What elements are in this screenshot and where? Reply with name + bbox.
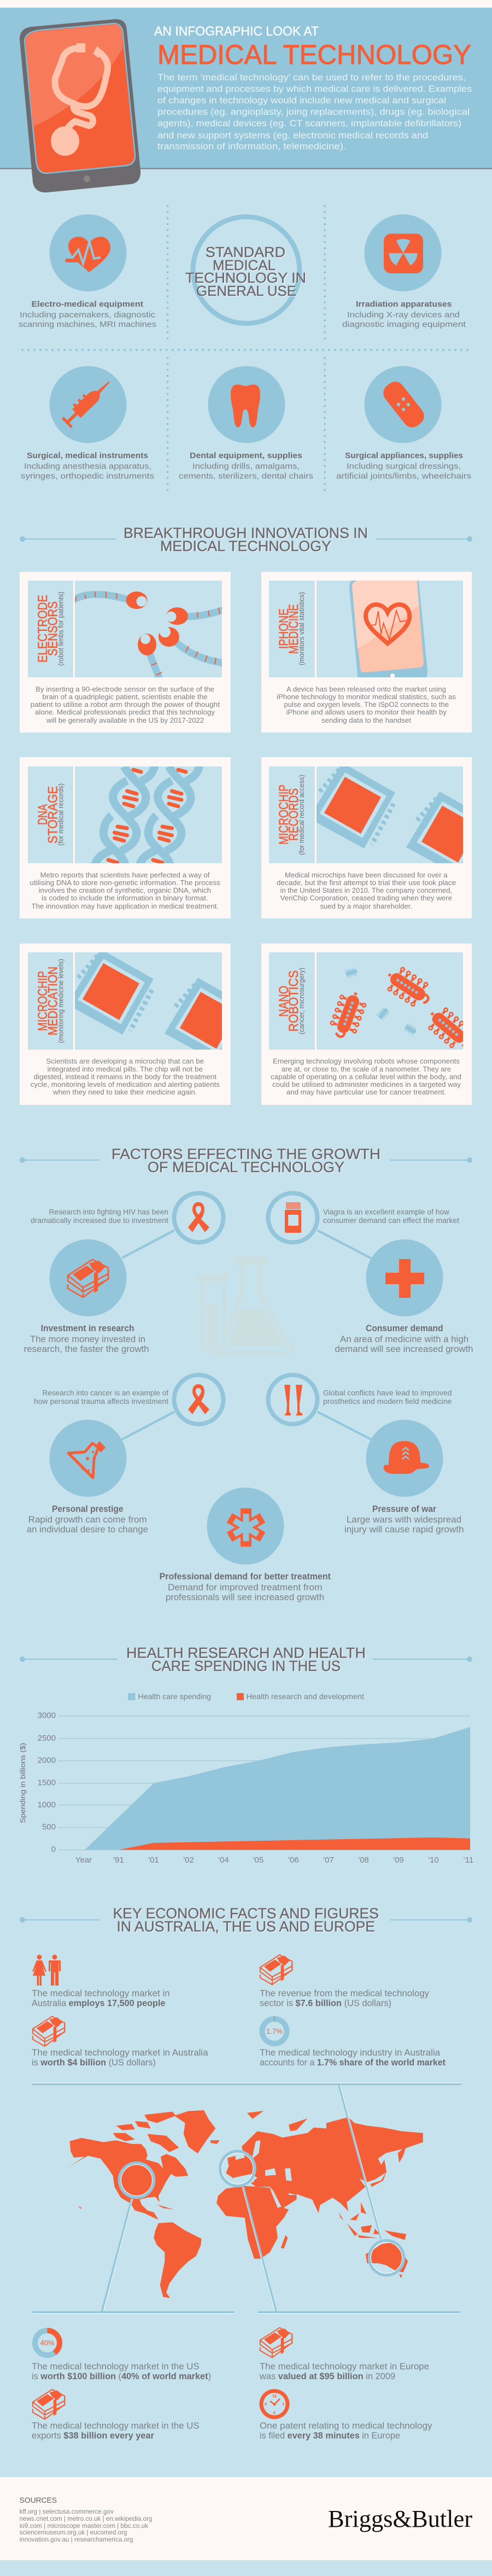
item: surgical, medical instruments: syringes, orthopedic instruments (21, 472, 154, 481)
factor: consumer demand: demand will see increased growth (335, 1344, 473, 1354)
area: health care spending (85, 1727, 470, 1850)
item: irradiation apparatuses (342, 214, 466, 329)
header title (154, 24, 471, 70)
item: surgical appliances, supplies: Surgical appliances, supplies (345, 451, 463, 460)
header title: AN INFOGRAPHIC LOOK AT (154, 24, 319, 39)
description: and may have particular use for cancer treatment. (286, 1088, 446, 1096)
vertical title (277, 775, 306, 855)
panel: footer (0, 2477, 492, 2560)
donut: 40 percent (35, 2331, 60, 2355)
heading: health research and spending: CARE SPENDING IN THE US (151, 1658, 341, 1675)
description (277, 871, 456, 910)
description: sending data to the handset (321, 716, 411, 724)
vertical title: DNA (36, 804, 50, 825)
fact: 1.7% share (260, 2016, 446, 2068)
description: A device has been released onto the market using (286, 685, 446, 693)
factor: personal prestige (27, 1375, 224, 1535)
heading: factors effecting growth: OF MEDICAL TECHNOLOGY (148, 1159, 344, 1175)
ring callout (34, 1375, 223, 1424)
ring callout: how personal trauma affects investment (34, 1397, 168, 1406)
fact: revenue $7.6 billion (260, 1955, 430, 2009)
legend: Health care spending (138, 1692, 211, 1701)
factor: pressure of war: Large wars with widespread (347, 1515, 461, 1525)
description: digested, instead it remains in the body for the treatment (33, 1073, 216, 1081)
region rings (119, 2151, 403, 2275)
description: By inserting a 90-electrode sensor on the surface of the (36, 685, 214, 693)
description: is coded to include the information in binary format. (42, 894, 208, 902)
factor: consumer demand: An area of medicine with a high (340, 1334, 468, 1344)
icon: clock: 3 (282, 2403, 284, 2407)
icon: clock (259, 2389, 290, 2419)
heading: breakthrough innovations: MEDICAL TECHNOLOGY (160, 538, 331, 554)
x axis labels (75, 1855, 473, 1865)
y axis labels (38, 1711, 56, 1854)
fact: patent every 38 minutes: One patent relating to medical technology (260, 2421, 432, 2431)
fact: exports $38 billion: exports $38 billion every year (32, 2431, 155, 2441)
panel: iphone medicine (261, 572, 472, 733)
item: dental equipment, supplies (179, 366, 313, 481)
item: surgical, medical instruments: Including anesthesia apparatus, (24, 462, 151, 471)
callout lines (32, 2083, 461, 2085)
fact: revenue $7.6 billion: sector is $7.6 billion (US dollars) (260, 1999, 391, 2009)
sources: sciencemuseum.org.uk | eucomed.org (20, 2528, 127, 2536)
ring callout: dramatically increased due to investment (31, 1216, 168, 1225)
vertical title: MEDICINE (286, 604, 301, 654)
fact: valued at $95 billion (259, 2328, 429, 2381)
sources: io9.com | microscope master.com | bbc.co.uk (20, 2522, 149, 2530)
intro paragraph: equipment and processes by which medical care is delivered. Examples (157, 84, 472, 94)
description: iPhone technology to monitor medical statistics, such as (277, 693, 456, 701)
chart: health care spending area chart (19, 1692, 473, 1865)
fact: valued at $95 billion: The medical technology market in Europe (260, 2362, 429, 2372)
map: inland seas (234, 2140, 292, 2182)
intro paragraph: of changes in technology would include new medical and surgical (157, 95, 446, 106)
vertical title: ELECTRODE (36, 595, 50, 663)
icon: clock: 12 (272, 2394, 277, 2398)
y axis labels: 0 (51, 1845, 56, 1854)
description (30, 871, 221, 910)
legend (128, 1692, 364, 1701)
ring callout (268, 1375, 452, 1424)
vertical title: ROBOTICS (286, 970, 301, 1032)
item: irradiation apparatuses: Including X-ray devices and (347, 311, 460, 319)
sources: kff.org | selectusa.commerce.gov (20, 2508, 114, 2515)
item: surgical, medical instruments: Surgical, medical instruments (27, 451, 148, 460)
heading: health research and spending: HEALTH RESEARCH AND HEALTH (126, 1645, 366, 1661)
icon: star of life (227, 1508, 265, 1547)
donut: 40 percent: 40% (40, 2339, 55, 2347)
item: surgical, medical instruments (21, 366, 154, 481)
fact: patent every 38 minutes: is filed every 38 minutes in Europe (260, 2431, 400, 2441)
vertical title: IPHONE (277, 608, 291, 649)
factor: pressure of war: Pressure of war (372, 1504, 437, 1514)
ring callout: consumer demand can effect the market (323, 1216, 459, 1225)
factor: personal prestige: Rapid growth can come from (28, 1515, 147, 1525)
heading: breakthrough innovations: BREAKTHROUGH INNOVATIONS IN (124, 525, 368, 541)
chart: health care spending area chart: Spending in billions ($) (19, 1743, 27, 1823)
logo: Briggs & Butler: Briggs&Butler (328, 2505, 472, 2532)
description: brain of a quadriplegic patient, scientists enable the (43, 693, 208, 701)
sources: SOURCES (20, 2496, 57, 2504)
factor: professional demand: professionals will see increased growth (166, 1593, 324, 1602)
fact: revenue $7.6 billion: The revenue from the medical technology (260, 1989, 430, 1999)
fact: exports $38 billion (32, 2390, 200, 2441)
world map (32, 2083, 461, 2314)
description: alone. Medical professionals predict that this technology (35, 708, 215, 716)
header title: MEDICAL TECHNOLOGY (157, 39, 471, 70)
factor: investment in research (24, 1193, 223, 1354)
vertical title: RECORDS (286, 788, 301, 841)
icon: clock: 9 (265, 2403, 267, 2407)
description: involves the creation of synthetic, organic DNA, which (39, 886, 211, 894)
illustration: nano robots (330, 967, 463, 1049)
intro paragraph: transmission of information, telemedicine). (157, 141, 346, 151)
factor: personal prestige: an individual desire to change (27, 1525, 148, 1535)
icon: clock: 6 (273, 2411, 276, 2415)
heading: factors effecting growth: FACTORS EFFECTING THE GROWTH (112, 1146, 380, 1162)
factor: investment in research: research, the faster the growth (24, 1344, 149, 1354)
fact: patent every 38 minutes (259, 2389, 432, 2441)
centre ring heading: MEDICAL (213, 258, 276, 273)
description: decade, but the first attempt to trial their use took place (277, 879, 456, 887)
item: electro-medical equipment: Electro-medical equipment (32, 300, 143, 309)
sources: news.cnet.com | metro.co.uk | en.wikipedia.org (20, 2515, 152, 2522)
description: cycle, monitoring levels of medication and alerting patients (31, 1080, 220, 1088)
description: Metro reports that scientists have perfected a way of (40, 871, 210, 879)
ring callout: prosthetics and modern field medicine (323, 1397, 452, 1406)
item: surgical appliances, supplies: artificial joints/limbs, wheelchairs (336, 472, 471, 481)
panel: nano robotics (261, 944, 476, 1105)
factor: pressure of war: injury will cause rapid growth (344, 1525, 464, 1535)
factor: personal prestige: Personal prestige (52, 1504, 124, 1514)
centre ring heading: TECHNOLOGY IN (185, 271, 306, 286)
fact: employs 17,500 people (32, 1955, 169, 2009)
fact: exports $38 billion: The medical technology market in the US (32, 2421, 200, 2431)
item: electro-medical equipment (19, 214, 156, 329)
panel: microchip medication (20, 944, 251, 1105)
heading: key economic facts: IN AUSTRALIA, THE US AND EUROPE (117, 1918, 375, 1935)
description: patient to utilise a robot arm through the power of thought (31, 700, 220, 709)
ring callout: Global conflicts have lead to improved (323, 1389, 452, 1397)
description: could be utilised to administer medicines in a targeted way (272, 1080, 461, 1088)
item: dental equipment, supplies: cements, sterilizers, dental chairs (179, 472, 313, 481)
item: electro-medical equipment: scanning machines, MRI machines (19, 320, 156, 329)
description: capable of operating on a cellular level within the body, and (271, 1073, 461, 1081)
illustration: dna helices (95, 763, 200, 867)
centre ring heading: STANDARD (206, 245, 285, 260)
factor: investment in research: The more money invested in (30, 1334, 145, 1344)
vertical title: (cancer, microsurgery) (298, 968, 306, 1034)
illustration: phone with heart (349, 577, 427, 681)
ring callout: Viagra is an excellent example of how (323, 1208, 450, 1216)
panel: dna storage (20, 757, 231, 918)
x axis labels: '04 (218, 1855, 229, 1865)
fact: employs 17,500 people: The medical technology market in (32, 1989, 169, 1999)
description (31, 685, 220, 724)
centre ring heading (185, 216, 306, 324)
description (277, 685, 456, 724)
x axis labels: '91 (113, 1855, 124, 1865)
factor: professional demand: Demand for improved treatment from (168, 1583, 323, 1593)
icon: tipped flask (68, 1441, 106, 1478)
item: dental equipment, supplies: Dental equipment, supplies (190, 451, 302, 460)
description: Scientists are developing a microchip that can be (46, 1057, 204, 1065)
factor: professional demand (160, 1488, 331, 1602)
factor: consumer demand (268, 1193, 473, 1354)
description: sued by a major shareholder. (320, 902, 412, 910)
description: The innovation may have application in medical treatment. (31, 902, 219, 910)
description: in the United States in 2010. The company concerned, (280, 886, 452, 894)
grid dividers (22, 206, 468, 493)
panel: microchip records (261, 757, 492, 918)
factor: consumer demand: Consumer demand (366, 1324, 443, 1333)
vertical title (36, 592, 65, 666)
area: health research and development (119, 1837, 470, 1850)
description: Medical microchips have been discussed for over a (285, 871, 448, 879)
x axis labels: Year (75, 1855, 92, 1865)
x axis labels: '07 (323, 1855, 334, 1865)
description: are at, or close to, the scale of a nanometer. They are (282, 1065, 451, 1073)
ring callout (268, 1193, 459, 1242)
x axis labels: '06 (288, 1855, 299, 1865)
description: VeriChip Corporation, ceased trading when they were (280, 894, 452, 902)
heading: factors effecting growth (20, 1146, 472, 1175)
description: Emerging technology involving robots whose components (273, 1057, 460, 1065)
fact: worth $4 billion (32, 2016, 208, 2068)
x axis labels: '10 (428, 1855, 439, 1865)
intro paragraph (157, 72, 472, 151)
item: surgical appliances, supplies: Including surgical dressings, (347, 462, 461, 471)
centre ring heading: GENERAL USE (196, 284, 296, 299)
vertical title: (robot limbs for patients) (57, 592, 65, 666)
vertical title: (monitors vital statistics) (298, 592, 306, 665)
vertical title: MICROCHIP (277, 784, 291, 845)
vertical title (36, 959, 65, 1043)
x axis labels: '01 (148, 1855, 159, 1865)
vertical title: (monitoring medicine levels) (57, 959, 65, 1043)
item: electro-medical equipment: Including pacemakers, diagnostic (20, 311, 156, 319)
panel: electrode sensors (20, 572, 231, 733)
panel: standard medical technology grid (19, 206, 471, 493)
ring callout: Research into cancer is an example of (43, 1389, 168, 1397)
vertical title: NANO (277, 986, 291, 1017)
top cream strip (0, 0, 492, 8)
fact: worth $100 billion: The medical technology market in the US (32, 2362, 200, 2372)
vertical title: (for medical record access) (298, 775, 306, 855)
item: irradiation apparatuses: Irradiation apparatuses (356, 300, 452, 309)
illustration: microchips (317, 766, 463, 863)
description: integrated into medical pills. The chip will not be (48, 1065, 203, 1073)
vertical title (277, 592, 306, 665)
factor: professional demand: Professional demand for better treatment (160, 1572, 331, 1582)
vertical title (277, 968, 306, 1034)
item: surgical appliances, supplies (336, 366, 471, 481)
x axis labels: '11 (464, 1855, 473, 1865)
fact: worth $4 billion: The medical technology market in Australia (32, 2048, 208, 2058)
intro paragraph: and new support systems (eg. electronic medical records and (157, 130, 428, 140)
vertical title: (for medical records) (57, 783, 65, 846)
x axis labels: '08 (358, 1855, 369, 1865)
fact: valued at $95 billion: was valued at $95 billion in 2009 (259, 2372, 395, 2381)
description: iPhone and allows users to monitor their health by (286, 708, 447, 716)
map: continents (67, 2110, 423, 2298)
factor: pressure of war (268, 1375, 464, 1535)
y axis labels: 1500 (38, 1778, 56, 1788)
fact: 1.7% share: The medical technology industry in Australia (260, 2048, 441, 2058)
x axis labels: '05 (253, 1855, 263, 1865)
y axis labels: 500 (42, 1823, 56, 1831)
heading: breakthrough innovations (20, 525, 472, 554)
background illustration: flask and test tube (198, 1258, 292, 1354)
heading: health research and spending (20, 1645, 472, 1675)
vertical title (36, 783, 65, 846)
fact: employs 17,500 people: Australia employs 17,500 people (32, 1999, 165, 2009)
vertical title: MEDICATION (46, 967, 60, 1035)
vertical title: SENSORS (46, 601, 60, 656)
factor: investment in research: Investment in research (41, 1324, 134, 1333)
x axis labels: '02 (183, 1855, 194, 1865)
sources (20, 2496, 152, 2543)
item: irradiation apparatuses: diagnostic imaging equipment (342, 320, 466, 329)
x axis labels: '09 (393, 1855, 404, 1865)
y axis labels: 3000 (38, 1711, 56, 1720)
ring callout: Research into fighting HIV has been (49, 1208, 168, 1216)
vertical title: STORAGE (46, 786, 60, 844)
description: will be generally available in the US by 2017-2022 (46, 716, 204, 724)
intro paragraph: agents), medical devices (eg. CT scanners, implantable defibrillators) (157, 118, 461, 128)
heading: key economic facts: KEY ECONOMIC FACTS AND FIGURES (113, 1905, 379, 1922)
fact: 1.7% share: accounts for a 1.7% share of the world market (260, 2058, 446, 2068)
description (271, 1057, 461, 1096)
sources: innovation.gov.au | researchamerica.org (20, 2536, 133, 2543)
heading: key economic facts (20, 1905, 472, 1935)
y axis labels: 2000 (38, 1756, 56, 1765)
panel: header band (0, 8, 492, 169)
fact: 1.7% share: 1.7% (266, 2027, 283, 2035)
y axis labels: 1000 (38, 1800, 56, 1810)
vertical title: MICROCHIP (36, 971, 50, 1031)
legend: Health research and development (247, 1692, 364, 1701)
illustration: microchips (75, 952, 222, 1050)
fact: worth $100 billion (32, 2331, 211, 2381)
fact: worth $4 billion: is worth $4 billion (US dollars) (32, 2058, 156, 2068)
y axis labels: 2500 (38, 1734, 56, 1743)
icon: people (32, 1955, 61, 1986)
description: utilising DNA to store non-genetic information. The process (30, 879, 221, 887)
description: pulse and oxygen levels. The iSpO2 connects to the (284, 700, 449, 709)
intro paragraph: procedures (eg. angioplasty, joing replacements), drugs (eg. biological (157, 107, 470, 117)
description: when they need to take their medicine again. (52, 1088, 197, 1096)
intro paragraph: The term ‘medical technology’ can be used to refer to the procedures, (157, 72, 466, 83)
illustration: robot claws (71, 592, 224, 681)
ring callout (31, 1193, 223, 1242)
item: dental equipment, supplies: Including drills, amalgams, (192, 462, 300, 471)
fact: worth $100 billion: is worth $100 billion (40% of world market) (32, 2372, 211, 2381)
description (31, 1057, 220, 1096)
icon: tablet with stethoscope (20, 19, 140, 192)
